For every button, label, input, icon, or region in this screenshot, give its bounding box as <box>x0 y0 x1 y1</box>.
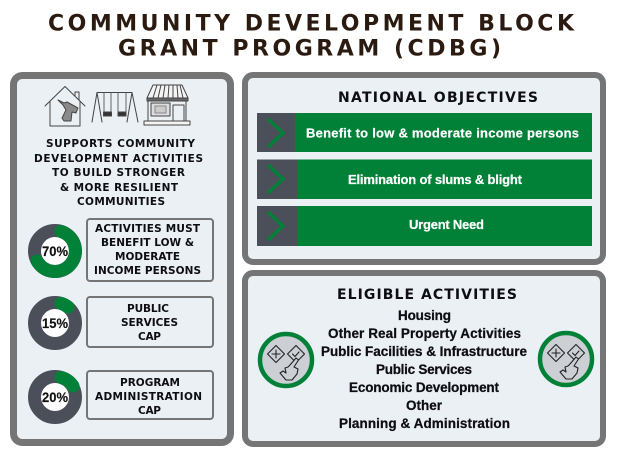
panel: national objectives <box>245 75 603 262</box>
objective bar: benefit to low and moderate income persons: Benefit to low & moderate income persons <box>306 126 579 140</box>
text block: program description: COMMUNITIES <box>77 196 165 208</box>
callout: program administration cap: PROGRAM <box>120 377 180 389</box>
donut chart: 15% <box>34 302 76 344</box>
donut chart: 70% <box>34 230 76 272</box>
callout: low and moderate income: INCOME PERSONS <box>94 265 201 277</box>
list: eligible activities: Housing <box>398 308 451 323</box>
list: eligible activities: Other <box>406 398 443 413</box>
icon: storefront <box>144 85 190 125</box>
objective bar: elimination of slums and blight: Elimination of slums & blight <box>348 172 523 187</box>
list: eligible activities: Economic Development <box>349 380 500 395</box>
donut chart: 20% <box>34 376 76 418</box>
callout: public services cap: CAP <box>138 331 161 343</box>
objective bar: urgent need: Urgent Need <box>409 217 484 232</box>
text block: program description: SUPPORTS COMMUNITY <box>46 138 195 150</box>
heading: eligible activities: ELIGIBLE ACTIVITIES <box>337 287 517 303</box>
text block: program description: & MORE RESILIENT <box>60 182 179 194</box>
list: eligible activities: Planning & Administration <box>339 416 510 431</box>
icon: house with drill <box>45 86 85 126</box>
text block: program description: DEVELOPMENT ACTIVITIES <box>34 153 203 165</box>
objective bar: elimination of slums and blight <box>257 160 592 199</box>
list: eligible activities: Public Services <box>376 362 472 377</box>
donut chart: 20%: 20% <box>42 389 69 405</box>
list: eligible activities <box>321 308 527 431</box>
text block: program description: TO BUILD STRONGER <box>52 167 185 179</box>
callout: low and moderate income: ACTIVITIES MUST <box>95 223 201 235</box>
icon: voting hand left <box>260 334 312 386</box>
callout: low and moderate income <box>87 219 213 281</box>
objective bar: benefit to low and moderate income persons <box>257 113 592 152</box>
text block: program description <box>34 138 203 208</box>
icon: swing set <box>92 92 138 122</box>
heading: national objectives: NATIONAL OBJECTIVES <box>338 90 538 106</box>
callout: program administration cap <box>87 371 213 419</box>
list: eligible activities: Public Facilities & Infrastructure <box>321 344 527 359</box>
objective bar: urgent need <box>257 206 592 246</box>
list: eligible activities: Other Real Property Activities <box>328 326 521 341</box>
panel: program overview <box>14 76 230 442</box>
title: COMMUNITY DEVELOPMENT BLOCK <box>48 12 575 36</box>
donut chart: 15%: 15% <box>42 315 69 331</box>
title <box>48 12 575 62</box>
callout: public services cap: PUBLIC <box>127 303 169 315</box>
callout: program administration cap: ADMINISTRATION <box>95 391 202 403</box>
callout: public services cap: SERVICES <box>121 317 178 329</box>
callout: low and moderate income: BENEFIT LOW & <box>101 237 194 249</box>
callout: program administration cap: CAP <box>138 405 161 417</box>
callout: low and moderate income: MODERATE <box>115 251 180 263</box>
title: GRANT PROGRAM (CDBG) <box>118 36 501 62</box>
panel: eligible activities <box>245 273 603 444</box>
icon: voting hand right <box>540 333 592 385</box>
donut chart: 70%: 70% <box>42 243 69 259</box>
callout: public services cap <box>87 297 213 347</box>
